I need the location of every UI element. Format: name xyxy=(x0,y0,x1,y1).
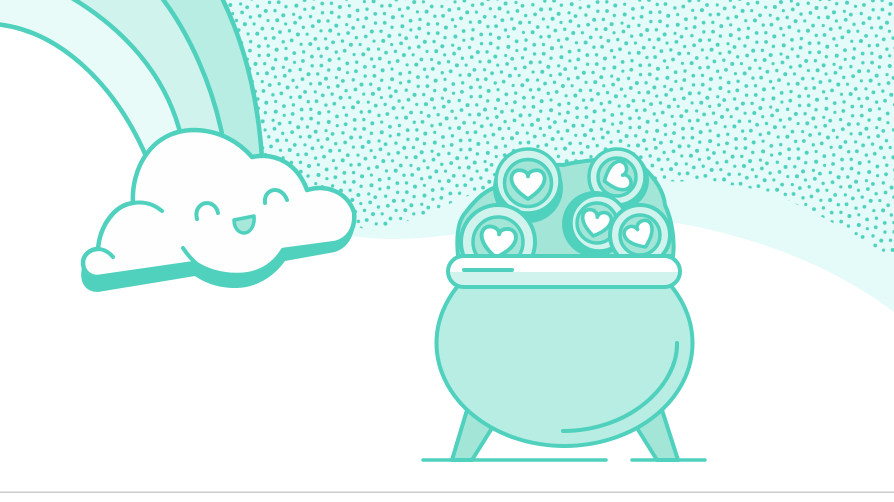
coin pile backing xyxy=(457,160,674,256)
pot legs xyxy=(452,410,678,460)
cloud shadow xyxy=(81,215,355,292)
cloud body xyxy=(83,130,354,277)
pot highlight xyxy=(563,343,677,431)
pot rim xyxy=(448,256,680,287)
background: dotted texture xyxy=(222,0,894,258)
coins xyxy=(459,147,672,254)
left eye xyxy=(196,203,218,219)
bottom edge line xyxy=(0,492,894,493)
rainbow band: inner xyxy=(0,0,180,158)
mouth xyxy=(234,216,254,233)
background: pale wave xyxy=(200,0,894,312)
rainbow band: outer xyxy=(162,0,262,170)
coin: top left xyxy=(493,149,563,223)
pot body xyxy=(434,286,694,448)
coin: bottom left xyxy=(459,203,537,254)
right eye xyxy=(265,190,287,203)
coin: middle xyxy=(562,191,622,254)
ground lines xyxy=(423,458,705,462)
cloud inner curves xyxy=(98,202,196,263)
pot of coins xyxy=(423,149,705,460)
rainbow band: middle xyxy=(72,0,222,135)
coin: top right xyxy=(589,149,649,210)
coin: right xyxy=(608,203,672,254)
rim highlight xyxy=(464,268,512,272)
cloud xyxy=(81,130,355,292)
rainbow xyxy=(0,0,262,170)
